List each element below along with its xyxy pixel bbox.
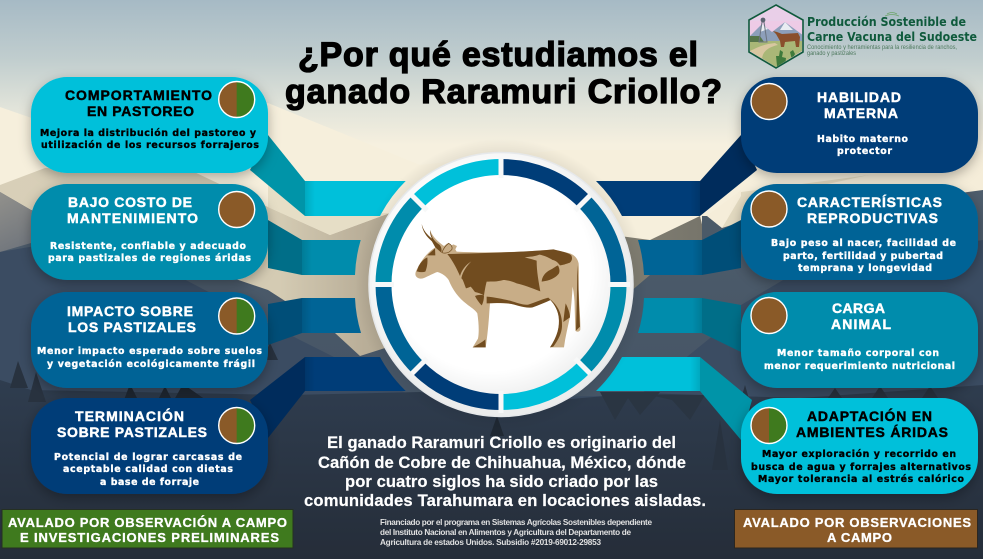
logo tagline: ganado y pastizales bbox=[807, 50, 856, 57]
text: habilidad description: Habito materno bbox=[817, 134, 909, 145]
text: breed origin paragraph bbox=[304, 433, 706, 510]
heading: comportamiento en pastoreo: EN PASTOREO bbox=[87, 103, 194, 119]
panel: comportamiento en pastoreo bbox=[31, 77, 268, 173]
heading: impacto sobre los pastizales: IMPACTO SOBRE bbox=[67, 303, 193, 319]
text: adaptación description: busca de agua y forrajes alternativos bbox=[751, 462, 971, 473]
text: funding note: Agricultura de estados Unidos. Subsidio #2019-69012-29853 bbox=[380, 538, 601, 547]
heading: carga animal: ANIMAL bbox=[831, 316, 891, 332]
heading: carga animal bbox=[831, 300, 891, 332]
title: ¿Por qué estudiamos el bbox=[298, 36, 698, 74]
panel: bajo costo de mantenimiento bbox=[31, 184, 268, 280]
heading: adaptación en ambientes áridas bbox=[796, 407, 948, 440]
legend: green field and preliminary research: E INVESTIGACIONES PRELIMINARES bbox=[20, 530, 279, 545]
heading: bajo costo de mantenimiento: MANTENIMIENTO bbox=[67, 210, 198, 226]
text: impacto description bbox=[37, 346, 262, 370]
text: adaptación description: Mayor tolerancia al estrés calórico bbox=[758, 474, 965, 485]
text: terminación description: a base de forraje bbox=[100, 477, 199, 488]
text: breed origin paragraph: Cañón de Cobre de Chihuahua, México, dónde bbox=[318, 453, 686, 472]
icon: cow silhouette bbox=[415, 224, 580, 347]
trees bbox=[10, 343, 938, 470]
legend: brown field observations: A CAMPO bbox=[827, 530, 892, 545]
text: terminación description: Potencial de lograr carcasas de bbox=[54, 452, 242, 463]
logo wordmark: Producción Sostenible de bbox=[807, 14, 966, 29]
text: funding note: Financiado por el programa en Sistemas Agrícolas Sostenibles dependiente bbox=[380, 518, 652, 527]
legend: brown field observations bbox=[734, 510, 978, 548]
text: características description: parto, fertilidad y pubertad bbox=[783, 251, 943, 262]
heading: terminación sobre pastizales bbox=[57, 407, 207, 440]
heading: habilidad materna: MATERNA bbox=[824, 105, 898, 121]
logo tagline bbox=[807, 44, 957, 57]
legend: green field and preliminary research: AVALADO POR OBSERVACIÓN A CAMPO bbox=[8, 515, 287, 530]
heading: habilidad materna bbox=[817, 89, 901, 121]
text: impacto description: Menor impacto esperado sobre suelos bbox=[37, 346, 262, 357]
icon: brown and green evidence dot bbox=[219, 82, 255, 118]
heading: habilidad materna: HABILIDAD bbox=[817, 89, 901, 105]
heading: impacto sobre los pastizales bbox=[67, 303, 196, 335]
icon: brown and green evidence dot bbox=[219, 298, 255, 334]
text: adaptación description: Mayor exploración y recorrido en bbox=[762, 449, 956, 460]
connector bands: right side bbox=[596, 135, 757, 440]
panel: impacto sobre los pastizales bbox=[31, 292, 268, 388]
heading: adaptación en ambientes áridas: AMBIENTES ÁRIDAS bbox=[796, 424, 948, 440]
icon: hexagon ranch scene bbox=[748, 5, 804, 69]
heading: comportamiento en pastoreo: COMPORTAMIENTO bbox=[65, 87, 212, 103]
heading: bajo costo de mantenimiento bbox=[67, 194, 198, 226]
text: carga description: menor requerimiento nutricional bbox=[764, 361, 955, 372]
heading: características reproductivas: REPRODUCTIVAS bbox=[807, 210, 938, 226]
text: características description: temprana y longevidad bbox=[798, 263, 932, 274]
text: impacto description: y vegetación ecológicamente frágil bbox=[47, 359, 255, 370]
icon: brown evidence dot bbox=[751, 298, 787, 334]
connector bands: left side bbox=[250, 135, 406, 438]
text: carga description bbox=[764, 348, 955, 372]
icon: brown evidence dot bbox=[751, 191, 787, 227]
heading: características reproductivas bbox=[797, 194, 942, 226]
panel: carga animal bbox=[741, 292, 978, 388]
panel: características reproductivas bbox=[741, 184, 978, 280]
icon: brown and green evidence dot bbox=[219, 408, 255, 444]
icon: brown evidence dot bbox=[751, 84, 787, 120]
text: adaptación description bbox=[751, 449, 971, 485]
text: características description bbox=[771, 238, 956, 274]
text: comportamiento description: Mejora la distribución del pastoreo y bbox=[40, 128, 256, 139]
legend: green field and preliminary research bbox=[2, 510, 293, 548]
text: habilidad description bbox=[817, 134, 909, 157]
icon: brown and green evidence dot bbox=[751, 408, 787, 444]
icon: brown evidence dot bbox=[219, 192, 255, 228]
panel: adaptación en ambientes áridas bbox=[741, 398, 978, 494]
panel: habilidad materna bbox=[741, 77, 978, 173]
text: características description: Bajo peso al nacer, facilidad de bbox=[771, 238, 956, 249]
heading: comportamiento en pastoreo bbox=[65, 87, 212, 119]
logo: Producción Sostenible de Carne Vacuna del Sudoeste bbox=[748, 5, 977, 69]
panel: terminación sobre pastizales bbox=[31, 398, 268, 494]
heading: adaptación en ambientes áridas: ADAPTACIÓN EN bbox=[807, 407, 932, 424]
legend: brown field observations: AVALADO POR OBSERVACIONES bbox=[743, 515, 971, 530]
text: terminación description bbox=[54, 452, 242, 488]
text: comportamiento description bbox=[40, 128, 259, 151]
text: funding note bbox=[380, 518, 652, 547]
heading: terminación sobre pastizales: SOBRE PASTIZALES bbox=[57, 424, 207, 440]
text: breed origin paragraph: por cuatro siglos ha sido criado por las bbox=[345, 472, 658, 491]
text: funding note: del Instituto Nacional en Alimentos y Agricultura del Departamento de bbox=[380, 528, 631, 537]
heading: terminación sobre pastizales: TERMINACIÓN bbox=[75, 407, 184, 424]
text: bajo costo description bbox=[48, 241, 251, 264]
logo tagline: Conocimiento y herramientas para la resiliencia de ranchos, bbox=[807, 44, 957, 51]
heading: impacto sobre los pastizales: LOS PASTIZALES bbox=[68, 319, 196, 335]
title bbox=[285, 36, 722, 111]
text: carga description: Menor tamaño corporal con bbox=[777, 348, 939, 359]
text: breed origin paragraph: El ganado Raramuri Criollo es originario del bbox=[327, 433, 676, 452]
title: ganado Raramuri Criollo? bbox=[285, 73, 722, 111]
logo wordmark bbox=[807, 12, 977, 44]
text: bajo costo description: para pastizales de regiones áridas bbox=[48, 253, 251, 264]
heading: carga animal: CARGA bbox=[832, 300, 885, 316]
central ring bbox=[355, 138, 647, 430]
heading: características reproductivas: CARACTERÍSTICAS bbox=[797, 194, 942, 210]
text: habilidad description: protector bbox=[837, 146, 892, 157]
text: terminación description: aceptable calidad con dietas bbox=[63, 464, 233, 475]
text: breed origin paragraph: comunidades Tarahumara en locaciones aisladas. bbox=[304, 491, 706, 510]
text: comportamiento description: utilización de los recursos forrajeros bbox=[41, 140, 259, 151]
text: bajo costo description: Resistente, confiable y adecuado bbox=[50, 241, 247, 252]
heading: bajo costo de mantenimiento: BAJO COSTO DE bbox=[68, 194, 192, 210]
